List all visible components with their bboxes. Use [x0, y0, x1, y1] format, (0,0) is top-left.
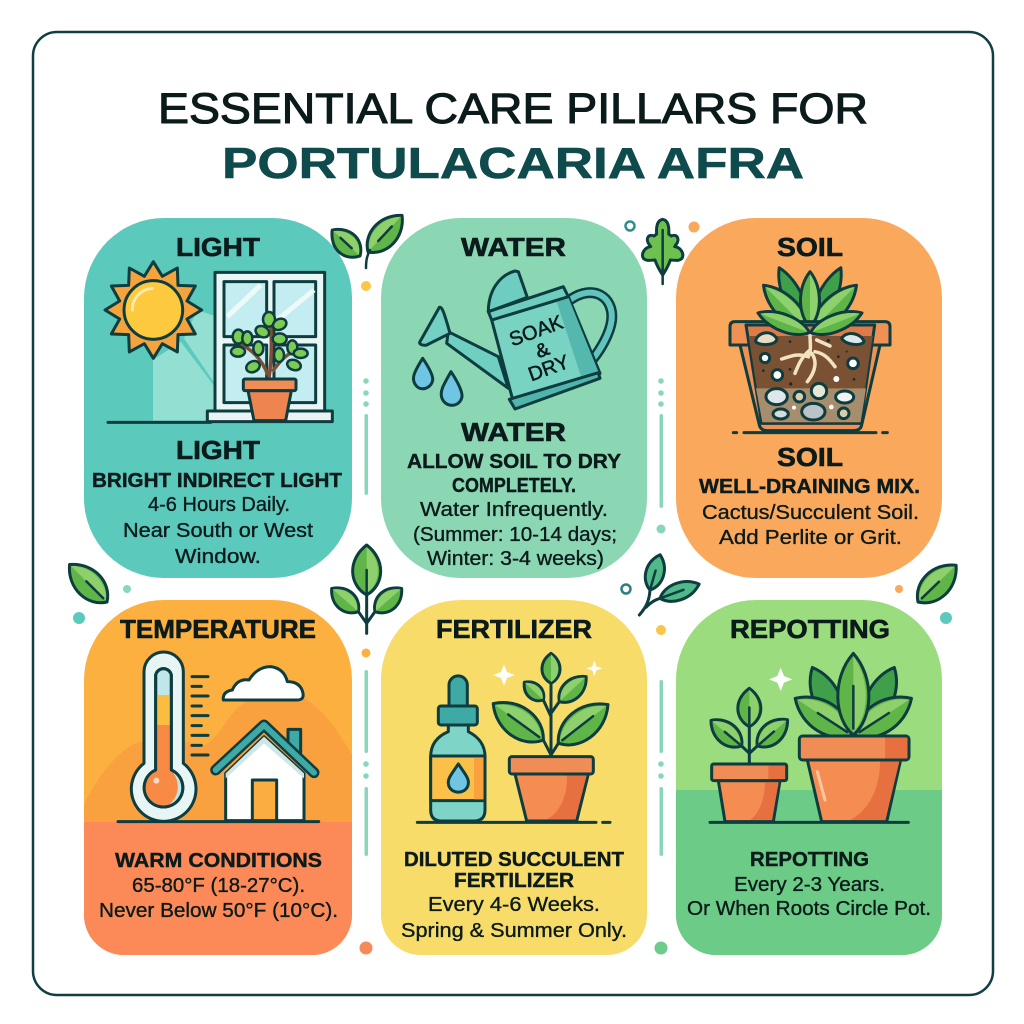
decoration: centre right sprig	[639, 552, 702, 615]
heading: water: WATER	[461, 232, 566, 262]
panel: fertilizer	[381, 600, 647, 955]
text: fertilizer	[401, 849, 627, 942]
icon: watering can: SOAK	[506, 311, 567, 351]
text: light: 4-6 Hours Daily.	[148, 494, 290, 516]
text: fertilizer: Spring & Summer Only.	[401, 920, 627, 942]
decoration: left leaf	[60, 555, 117, 612]
text: fertilizer: DILUTED SUCCULENT	[404, 849, 624, 871]
text: light: LIGHT	[176, 435, 260, 465]
heading: temperature: TEMPERATURE	[120, 614, 316, 644]
text: water: WATER	[461, 417, 566, 447]
icon: pot cross-section with soil layers and plant	[730, 264, 890, 433]
text: soil: Cactus/Succulent Soil.	[702, 502, 919, 524]
text: light	[92, 435, 342, 568]
text: light: BRIGHT INDIRECT LIGHT	[92, 470, 342, 492]
text: water: COMPLETELY.	[452, 475, 576, 497]
title	[158, 85, 868, 188]
decoration: centre left sprout	[325, 545, 408, 633]
panel: water	[381, 218, 647, 578]
text: fertilizer: FERTILIZER	[454, 870, 575, 892]
decoration: top leaf pair	[324, 207, 411, 268]
decoration: oak leaf	[643, 219, 683, 284]
text: soil: Add Perlite or Grit.	[719, 527, 902, 549]
heading: fertilizer: FERTILIZER	[436, 614, 592, 644]
heading: repotting: REPOTTING	[730, 614, 890, 644]
panel: repotting	[676, 600, 942, 955]
decoration: dots and dividers	[73, 222, 952, 954]
text: soil: SOIL	[777, 442, 843, 472]
heading: soil: SOIL	[777, 232, 843, 262]
title: ESSENTIAL CARE PILLARS FOR	[158, 85, 868, 133]
icon: thermometer and house	[118, 652, 319, 822]
text: repotting	[687, 849, 931, 920]
text: water: Winter: 3-4 weeks)	[427, 548, 604, 570]
text: temperature: Never Below 50°F (10°C).	[99, 900, 338, 922]
text: soil	[699, 442, 920, 549]
icon: sun, window and potted plant	[105, 262, 332, 422]
text: temperature	[99, 850, 338, 922]
text: water: (Summer: 10-14 days;	[413, 524, 617, 546]
icon: watering can: &	[532, 338, 553, 364]
text: temperature: WARM CONDITIONS	[115, 850, 322, 872]
icon: watering can	[413, 271, 612, 409]
icon: small and large potted plants	[704, 653, 920, 822]
panel: light	[84, 218, 352, 578]
panel: soil	[676, 218, 942, 578]
decoration: right leaf	[909, 555, 966, 612]
text: light: Near South or West	[123, 520, 313, 542]
text: repotting: Or When Roots Circle Pot.	[687, 898, 931, 920]
text: fertilizer: Every 4-6 Weeks.	[428, 894, 600, 916]
text: soil: WELL-DRAINING MIX.	[699, 476, 920, 498]
text: light: Window.	[175, 546, 261, 568]
text: repotting: Every 2-3 Years.	[734, 874, 885, 896]
icon: fertilizer dropper bottle and seedling	[417, 653, 617, 822]
text: repotting: REPOTTING	[750, 849, 869, 871]
heading: light: LIGHT	[176, 232, 260, 262]
title: PORTULACARIA AFRA	[222, 139, 804, 188]
text: water: ALLOW SOIL TO DRY	[407, 451, 622, 473]
panel: temperature	[84, 600, 352, 955]
text: water	[407, 417, 622, 570]
icon: watering can: DRY	[525, 351, 572, 386]
text: water: Water Infrequently.	[420, 499, 608, 521]
text: temperature: 65-80°F (18-27°C).	[132, 875, 305, 897]
